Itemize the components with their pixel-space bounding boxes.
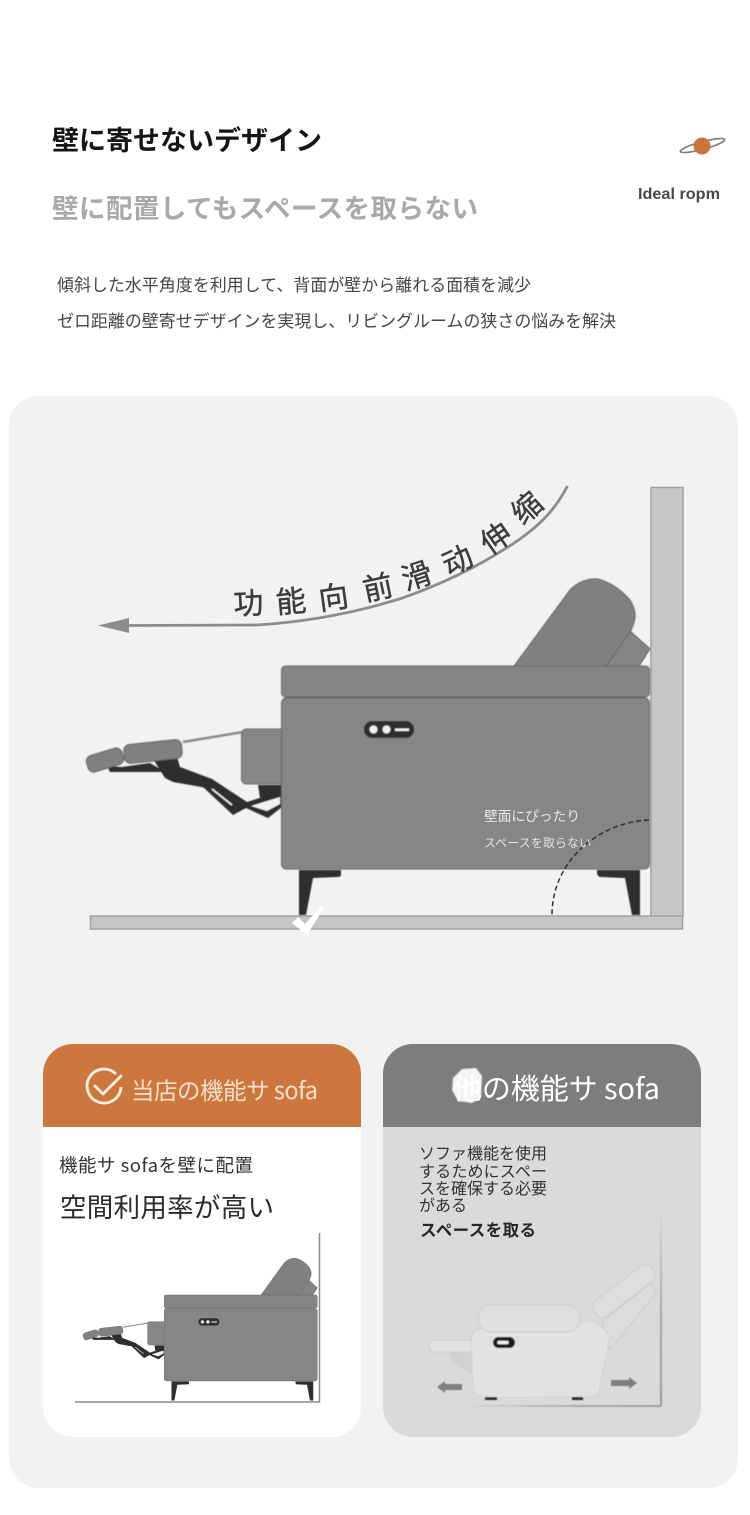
card text: がある bbox=[419, 1192, 467, 1216]
panel: our sofa card bbox=[43, 1044, 361, 1437]
dashed clearance arc bbox=[552, 820, 649, 915]
card text: 機能サ sofaを壁に配置 bbox=[59, 1152, 253, 1178]
arc label bbox=[233, 487, 550, 622]
white blur spot bbox=[452, 1068, 482, 1103]
recliner illustration bbox=[429, 1217, 661, 1406]
description text bbox=[57, 276, 616, 331]
subtitle: 壁に配置してもスペースを取らない bbox=[52, 194, 478, 224]
arc label: 缩 bbox=[505, 487, 550, 531]
panel: main grey background bbox=[9, 396, 738, 1488]
sofa note bbox=[484, 809, 591, 850]
card header bbox=[383, 1044, 701, 1127]
arc arrow bbox=[98, 486, 568, 633]
small sofa illustration bbox=[75, 1233, 320, 1402]
card text: スを確保する必要 bbox=[419, 1175, 547, 1199]
card header bbox=[43, 1044, 361, 1127]
arc label: 前 bbox=[360, 569, 396, 608]
description text: ゼロ距離の壁寄せデザインを実現し、リビングルームの狭さの悩みを解決 bbox=[57, 311, 616, 331]
card heading: 他の機能サ sofa bbox=[453, 1066, 660, 1108]
arc label: 滑 bbox=[398, 557, 436, 597]
card body bbox=[383, 1044, 701, 1437]
description text: 傾斜した水平角度を利用して、背面が壁から離れる面積を減少 bbox=[57, 276, 531, 295]
chart: sofa side view diagram bbox=[85, 486, 683, 935]
icon: planet bbox=[679, 136, 726, 155]
sofa note: 壁面にぴったり bbox=[484, 809, 580, 824]
arc label: 向 bbox=[317, 580, 351, 617]
arc label: 伸 bbox=[475, 517, 518, 561]
icon: white check mark bbox=[292, 905, 324, 935]
card text: するためにスペー bbox=[419, 1158, 547, 1182]
arc label: 动 bbox=[437, 540, 479, 583]
floor bbox=[90, 916, 682, 929]
arrow: right bbox=[611, 1377, 637, 1389]
arc label: 功 bbox=[233, 587, 264, 622]
card text bbox=[419, 1140, 547, 1216]
sofa note: スペースを取らない bbox=[484, 836, 591, 850]
card highlight: 空間利用率が高い bbox=[60, 1186, 274, 1225]
icon: check circle bbox=[87, 1069, 121, 1103]
wall bbox=[651, 488, 683, 916]
title: 壁に寄せないデザイン bbox=[52, 125, 322, 156]
card body bbox=[43, 1044, 361, 1437]
sofa illustration bbox=[85, 579, 650, 915]
card highlight: スペースを取る bbox=[420, 1217, 536, 1241]
brand name: Ideal ropm bbox=[638, 186, 720, 203]
panel: other sofa card bbox=[383, 1044, 701, 1437]
card text: ソファ機能を使用 bbox=[419, 1140, 547, 1164]
arrow: left bbox=[437, 1381, 462, 1393]
card heading: 当店の機能サ sofa bbox=[131, 1072, 318, 1106]
logo: planet and brand name bbox=[638, 136, 726, 203]
arc label: 能 bbox=[275, 585, 308, 620]
